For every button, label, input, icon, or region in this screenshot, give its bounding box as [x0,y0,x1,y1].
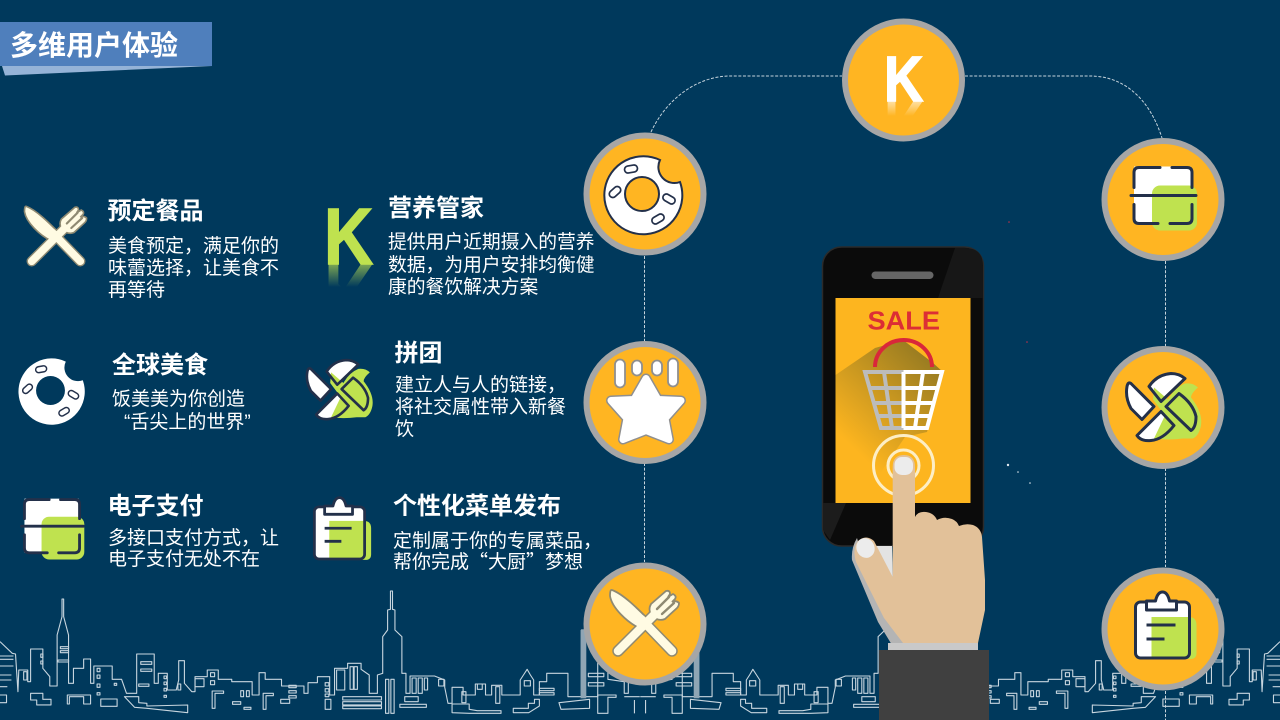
icon: green K: K [324,247,373,336]
circle: K: K [884,87,923,159]
feature: 营养管家: 提供用户近期摄入的营养 [388,231,595,252]
suit sleeve [879,650,989,720]
feature: 预定餐品: 味蕾选择，让美食不 [108,257,279,279]
feature: 电子支付: 电子支付无处不在 [108,548,260,570]
SALE label: SALE [868,306,940,336]
circle: scan [1104,141,1222,258]
circle: K [845,22,962,159]
speaker [872,272,934,279]
feature: 拼团 [307,340,566,440]
feature: 个性化菜单发布: 定制属于你的专属菜品， [393,526,602,553]
title banner [0,22,212,76]
circle: pinwheel [1104,349,1222,466]
feature: 全球美食: 饭美美为你创造 [112,388,245,410]
screen [836,298,970,503]
smartphone with sale screen [822,247,984,546]
feature: 预定餐品 [24,198,279,301]
feature: 全球美食: 全球美食 [112,351,208,379]
hand shadow [852,538,905,645]
hand pointing at phone [852,455,989,720]
thumb nail [853,535,878,561]
icon: donut [18,358,85,425]
tiny sparkles [1007,221,1031,484]
feature: 电子支付: 多接口支付方式，让 [108,527,279,549]
city skyline [0,591,1280,713]
circle: star [586,344,704,461]
basket handle [875,340,932,367]
feature: 营养管家: 康的餐饮解决方案 [388,276,538,297]
circle: knife and fork [586,566,704,682]
feature: 电子支付: 电子支付 [108,493,204,520]
circle: donut [586,136,704,252]
icon: knife and fork [24,206,87,261]
feature: 个性化菜单发布: 个性化菜单发布 [393,493,561,520]
feature: 拼团: 建立人与人的链接， [395,374,566,396]
basket shadow [836,340,943,503]
shopping basket [865,372,942,428]
feature: 拼团: 饮 [395,418,414,440]
feature: 营养管家: 数据，为用户安排均衡健 [388,254,595,275]
feature: 全球美食 [18,351,251,433]
shirt cuff [888,643,978,651]
icon: green K [324,192,373,336]
finger nail [894,457,913,475]
hand [854,455,985,643]
feature: 拼团: 将社交属性带入新餐 [395,396,566,418]
icon: green K: K [324,192,373,281]
feature: 营养管家: 营养管家 [388,195,484,222]
icon: scan frame [22,499,84,559]
circle: clipboard [1104,570,1222,688]
circle: K: K [884,43,923,115]
icon: pinwheel [307,360,373,419]
title banner: 多维用户体验 [10,30,178,61]
feature: 预定餐品: 再等待 [108,279,165,301]
icon: clipboard [314,498,371,560]
touch rings [874,436,934,496]
feature: 全球美食: “舌尖上的世界” [124,411,251,433]
feature: 个性化菜单发布: 帮你完成“大厨”梦想 [393,547,583,574]
phone body [822,247,984,546]
feature: 个性化菜单发布 [314,493,602,574]
feature: 营养管家 [324,192,595,336]
feature: 预定餐品: 美食预定，满足你的 [108,235,279,257]
feature: 电子支付 [22,493,279,570]
feature: 预定餐品: 预定餐品 [108,198,204,225]
palm gap [876,546,893,580]
dashed connector lines [644,76,1166,720]
feature: 拼团: 拼团 [394,340,442,367]
